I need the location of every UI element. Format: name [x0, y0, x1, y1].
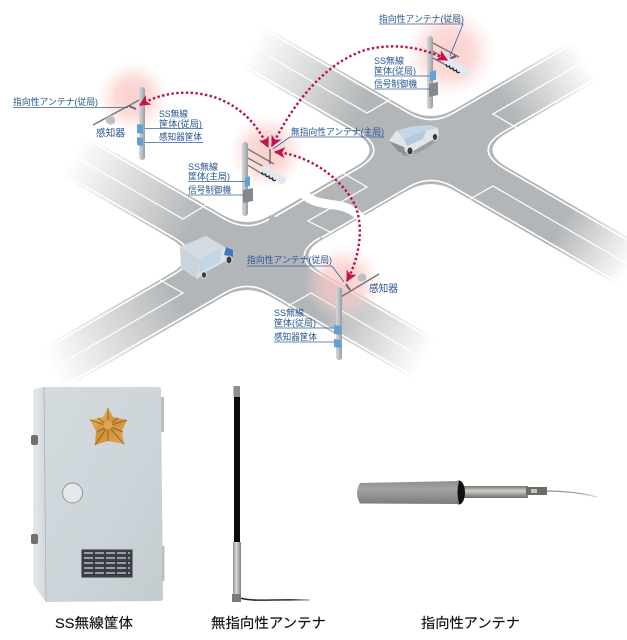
sensor housing — [334, 339, 341, 348]
directional antenna — [129, 106, 136, 109]
caption: omnidirectional antenna: 無指向性アンテナ — [211, 615, 326, 631]
SS radio housing — [137, 124, 143, 134]
arrow: left slave to main — [140, 93, 268, 147]
arrow: main to lower slave — [275, 152, 360, 281]
photo: SS radio housing — [31, 387, 164, 602]
cable — [545, 491, 597, 497]
traffic signal — [443, 57, 471, 78]
centre pole with main antenna and signal — [242, 142, 287, 216]
label: sensor housing, lower — [274, 331, 334, 342]
road break mark — [298, 188, 368, 225]
label: SS radio housing, main: 筐体(主局) — [188, 170, 230, 182]
signal glow: lower pole — [304, 244, 382, 322]
label: SS radio housing, upper right: 筐体(従局) — [374, 65, 416, 76]
directional antenna — [346, 284, 350, 290]
police emblem — [90, 408, 127, 445]
pole — [139, 87, 145, 160]
SS radio housing — [430, 70, 436, 81]
sensor housing — [137, 137, 143, 146]
pole — [427, 36, 433, 109]
signal controller — [429, 82, 438, 97]
SS radio housing — [334, 325, 341, 335]
label: directional antenna, upper right — [379, 13, 464, 56]
label: SS radio housing, main: SS無線 — [188, 161, 218, 172]
nameplate — [81, 549, 133, 578]
SS radio housing — [245, 176, 250, 187]
knob — [62, 483, 82, 503]
cable — [240, 598, 310, 600]
label: directional antenna, lower: 指向性アンテナ(従局) — [247, 254, 332, 265]
label: signal controller, centre: 信号制御機 — [188, 184, 231, 195]
label: SS radio housing, left — [145, 108, 203, 129]
label: sensor housing, lower: 感知器筐体 — [274, 331, 317, 342]
connector — [526, 487, 547, 495]
signal glow: left pole — [97, 61, 169, 133]
left pole with antenna and sensor — [93, 87, 145, 160]
arms — [246, 148, 274, 174]
arrow: main to upper right slave — [272, 46, 447, 146]
caption: SS radio housing: SS無線筐体 — [55, 615, 133, 631]
left bolts — [31, 435, 38, 445]
label: directional antenna, left — [13, 96, 128, 108]
base sleeve — [233, 542, 241, 595]
upper right pole with antenna and signal — [427, 36, 471, 109]
label: sensor housing, left: 感知器筐体 — [159, 131, 202, 142]
hinges — [161, 397, 164, 432]
lower junction roads — [0, 58, 547, 454]
whip — [234, 397, 240, 542]
label: SS radio housing, left: 筐体(従局) — [159, 118, 202, 129]
signal glow: centre pole — [229, 114, 305, 190]
label: signal controller, upper right: 信号制御機 — [374, 78, 417, 89]
upper junction roads — [131, 0, 627, 348]
arm — [93, 98, 143, 125]
crossing road connecting the junctions — [247, 123, 431, 283]
directional antenna — [447, 56, 456, 60]
sensor — [106, 115, 115, 125]
label: SS radio housing, lower: SS無線 — [274, 307, 304, 318]
top cap — [234, 386, 240, 397]
label: SS radio housing, upper right — [374, 55, 430, 76]
label: directional antenna, upper right: 指向性アンテナ(従局) — [379, 13, 464, 24]
base connector — [232, 594, 241, 602]
lane and stop lines — [0, 0, 627, 403]
front door — [44, 387, 163, 602]
label: sensor, lower: 感知器 — [369, 282, 398, 295]
signal controller — [243, 188, 253, 203]
photo: omnidirectional antenna — [232, 386, 310, 602]
label: sensor, left: 感知器 — [96, 126, 125, 140]
label: SS radio housing, main — [188, 161, 245, 182]
arms — [431, 42, 459, 65]
label: SS radio housing, lower — [274, 307, 333, 328]
arm — [339, 274, 379, 298]
label: omni antenna — [273, 126, 384, 149]
pole — [336, 287, 342, 360]
road network — [0, 0, 627, 454]
label: directional antenna, lower — [247, 254, 344, 282]
omni antenna — [269, 149, 271, 164]
cylinder end — [453, 480, 465, 504]
sensor — [358, 273, 366, 282]
car — [389, 125, 440, 160]
signal glow: upper right pole — [404, 7, 496, 99]
cylinder body — [357, 481, 459, 504]
label: omni antenna: 無指向性アンテナ(主局) — [291, 126, 384, 137]
label: SS radio housing, left: SS無線 — [159, 108, 188, 119]
rod — [462, 486, 528, 498]
pole — [242, 142, 248, 216]
lower pole with antenna and sensor — [334, 273, 379, 360]
label: SS radio housing, upper right: SS無線 — [374, 55, 404, 66]
caption: directional antenna: 指向性アンテナ — [421, 615, 520, 631]
photo: directional antenna — [357, 480, 597, 504]
traffic signal — [259, 165, 287, 186]
truck — [180, 236, 233, 279]
label: SS radio housing, lower: 筐体(従局) — [274, 317, 316, 328]
label: sensor housing, left — [145, 131, 203, 142]
side face — [33, 387, 46, 602]
label: directional antenna, left: 指向性アンテナ(従局) — [13, 96, 98, 107]
